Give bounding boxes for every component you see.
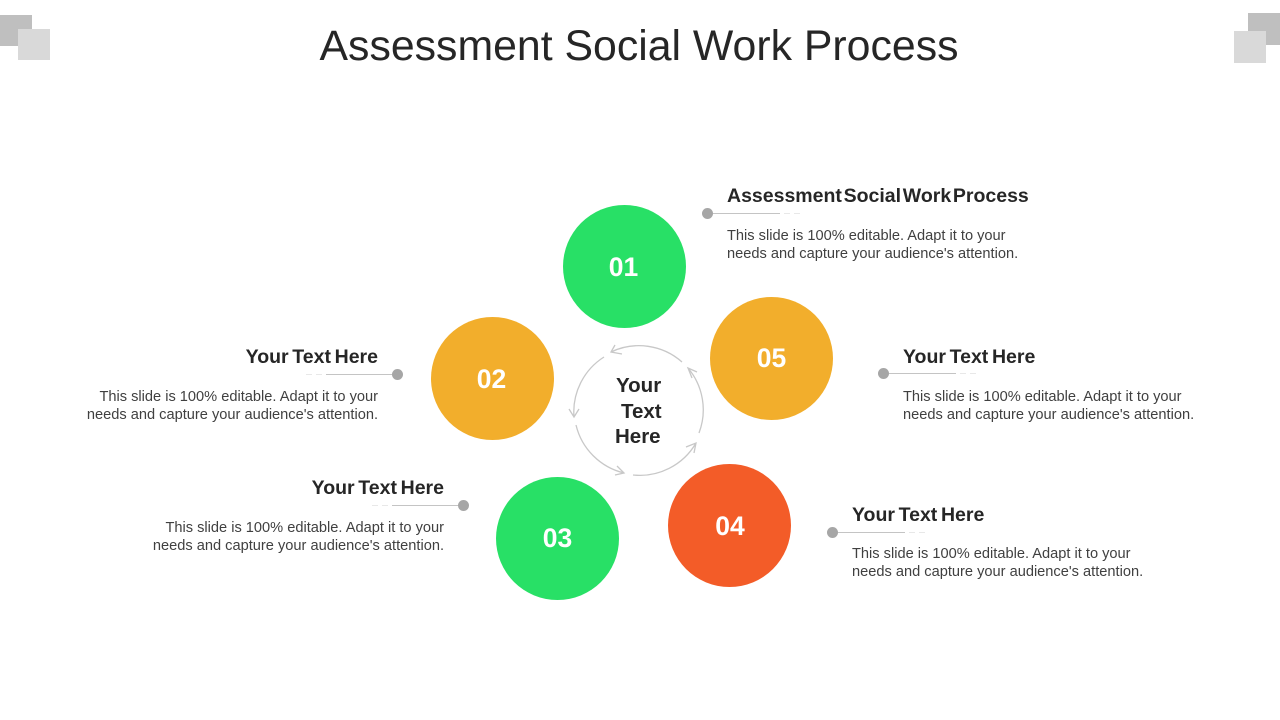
heading 04: Your Text Here [852,504,984,526]
connector 03 [372,500,469,511]
callout 04 [827,504,1143,580]
text 04 [852,546,1143,580]
callout 02 [87,346,403,423]
text 03 [153,520,444,554]
text 03: needs and capture your audience's attention. [153,538,444,554]
circle 05: 05 [757,343,786,373]
connector 04 [827,527,925,538]
text 03: This slide is 100% editable. Adapt it to your [165,520,444,536]
centre text [615,374,662,448]
callout 01 [702,185,1029,262]
circle 03 [496,477,619,600]
centre text: Text [621,400,662,422]
title: Assessment Social Work Process [320,22,958,70]
circle 05 [710,297,833,420]
callout 03 [153,477,469,554]
text 05 [903,389,1194,423]
text 01: needs and capture your audience's attention. [727,246,1018,262]
connector 01 [702,208,800,219]
heading 02: Your Text Here [246,346,378,368]
connector 02 [306,369,403,380]
circle 01 [563,205,686,328]
heading 05: Your Text Here [903,346,1035,368]
text 01 [727,228,1018,262]
text 02: This slide is 100% editable. Adapt it to your [99,389,378,405]
circle 01: 01 [609,252,638,282]
circle 02 [431,317,554,440]
circle 04: 04 [715,511,745,541]
text 04: This slide is 100% editable. Adapt it to your [852,546,1131,562]
text 02 [87,389,378,423]
text 05: This slide is 100% editable. Adapt it to your [903,389,1182,405]
text 01: This slide is 100% editable. Adapt it to your [727,228,1006,244]
circle 04 [668,464,791,587]
circle 02: 02 [477,364,506,394]
decoration: top-right squares [1234,13,1280,63]
centre text: Your [616,374,661,397]
decoration: top-left squares [0,15,50,60]
heading 01: Assessment Social Work Process [727,185,1029,207]
text 04: needs and capture your audience's attention. [852,564,1143,580]
text 05: needs and capture your audience's attention. [903,407,1194,423]
heading 03: Your Text Here [312,477,444,499]
callout 05 [878,346,1194,423]
circular arrows around centre text [568,344,704,476]
centre text: Here [615,425,661,448]
connector 05 [878,368,976,379]
text 02: needs and capture your audience's attention. [87,407,378,423]
circle 03: 03 [543,523,572,553]
